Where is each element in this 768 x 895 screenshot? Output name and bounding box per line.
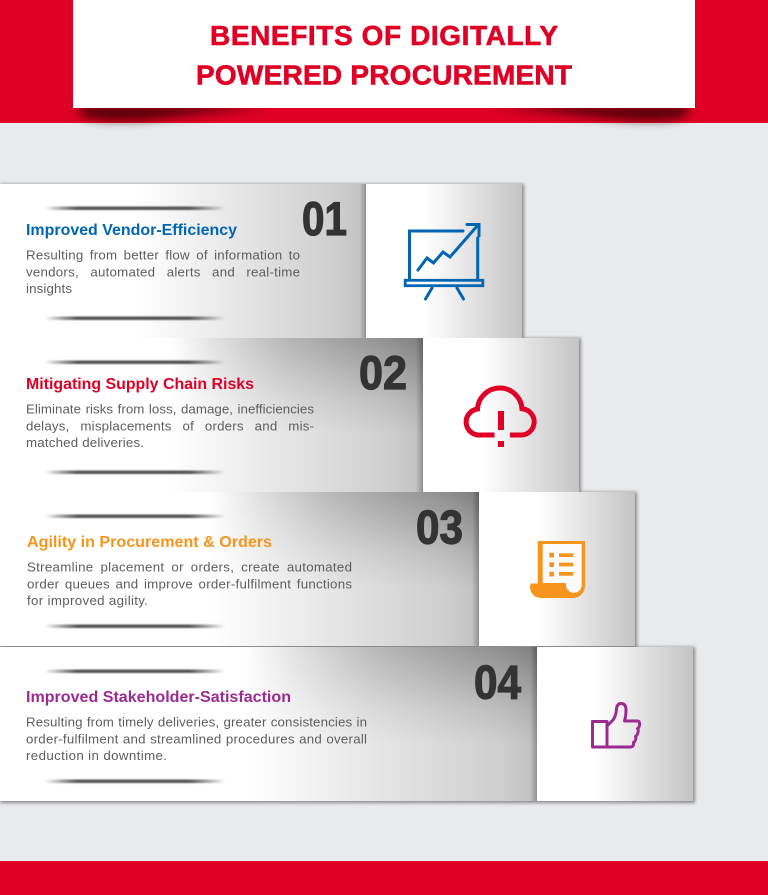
panel: card 01: [0, 184, 522, 338]
icon panel 04: [537, 647, 693, 801]
header red band: [0, 0, 768, 123]
number 02: 02: [359, 346, 407, 399]
title: POWERED PROCUREMENT: [196, 60, 572, 90]
icon: document scroll list: [530, 541, 585, 598]
number 04: 04: [474, 656, 521, 708]
icon: thumbs up: [592, 704, 640, 747]
panel: card 03: [0, 492, 635, 646]
heading 01: Improved Vendor-Efficiency: [26, 222, 237, 239]
number 01: 01: [302, 192, 347, 245]
title panel: [73, 0, 695, 108]
heading 02: Mitigating Supply Chain Risks: [26, 376, 254, 393]
body 02: [26, 402, 314, 450]
number 03: 03: [416, 500, 463, 554]
body 03: for improved agility.: [27, 593, 148, 608]
body 04: order-fulfilment and streamlined procedures and overall: [26, 732, 367, 746]
icon panel 02: [423, 338, 579, 492]
footer red band: [0, 861, 768, 895]
panel: card 02: [0, 338, 579, 492]
body 02: Eliminate risks from loss, damage, inefficiencies: [26, 402, 314, 416]
text panel 04: [0, 647, 537, 801]
icon panel 01: [366, 184, 522, 338]
header panel shadow: [78, 106, 690, 120]
body 01: insights: [26, 281, 72, 296]
body 01: vendors, automated alerts and real-time: [26, 264, 300, 280]
panel: card 04: [0, 647, 693, 801]
heading 03: Agility in Procurement & Orders: [27, 534, 272, 551]
body 01: [26, 248, 300, 296]
icon: chart on presentation board: [405, 224, 483, 299]
body 02: delays, misplacements of orders and mis-: [26, 418, 314, 434]
body 03: [27, 560, 352, 608]
icon: cloud warning: [466, 388, 534, 447]
body 04: reduction in downtime.: [26, 748, 167, 763]
text panel 02: [0, 338, 423, 492]
icon panel 03: [479, 492, 635, 646]
body 03: order queues and improve order-fulfilment functions: [27, 576, 352, 592]
heading 04: Improved Stakeholder-Satisfaction: [26, 689, 291, 706]
body 03: Streamline placement or orders, create automated: [27, 560, 352, 574]
body 04: Resulting from timely deliveries, greater consistencies in: [26, 714, 367, 730]
body 04: [26, 714, 367, 763]
text panel 03: [0, 492, 479, 646]
title: [196, 20, 572, 90]
text panel 01: [0, 184, 366, 338]
body 02: matched deliveries.: [26, 435, 144, 450]
title: BENEFITS OF DIGITALLY: [210, 20, 558, 51]
body 01: Resulting from better flow of information to: [26, 248, 300, 262]
